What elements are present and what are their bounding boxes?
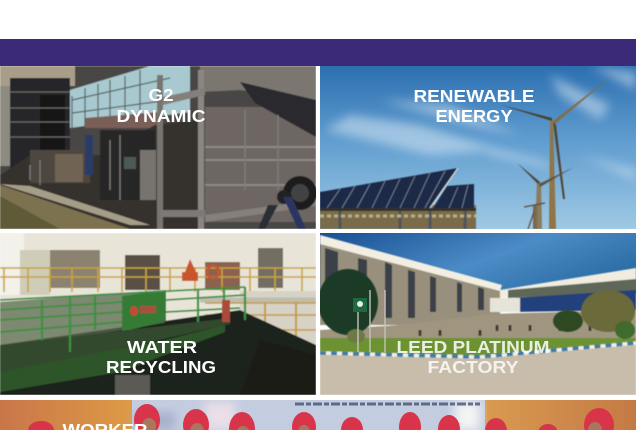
label: Water Recycling	[107, 341, 215, 373]
tank	[0, 310, 316, 395]
panel: Worker photo strip	[0, 400, 636, 430]
label: G2 Dynamic	[118, 89, 205, 122]
green structure	[0, 290, 165, 350]
photo: dyeing machine	[0, 66, 317, 229]
label: Renewable Energy: RENEWABLE	[414, 86, 534, 106]
ground	[320, 340, 636, 395]
clouds	[325, 66, 636, 180]
panel: G2 Dynamic	[0, 66, 317, 229]
flag poles and flag	[353, 290, 385, 352]
illustration: wind turbines	[501, 75, 613, 229]
building	[320, 240, 500, 325]
label: Water Recycling: RECYCLING	[106, 357, 216, 377]
glass wall	[70, 66, 190, 128]
label: LEED Platinum Factory: FACTORY	[428, 357, 519, 377]
panel: Renewable Energy	[320, 66, 636, 229]
panel: LEED Platinum Factory	[318, 233, 636, 395]
photo: recycling plant	[0, 233, 316, 395]
header band	[0, 39, 636, 66]
label: Water Recycling: WATER	[127, 337, 197, 357]
label: LEED Platinum Factory: LEED PLATINUM	[396, 337, 550, 357]
wall and floor	[240, 290, 316, 345]
illustration: solar panels	[320, 168, 476, 229]
label: G2 Dynamic: G2	[148, 85, 174, 105]
label: LEED Platinum Factory	[398, 341, 548, 373]
faces	[142, 418, 602, 430]
photo: sky	[320, 66, 636, 229]
machine body	[0, 120, 200, 229]
trees	[318, 269, 635, 343]
panel: Water Recycling	[0, 233, 316, 395]
label: Renewable Energy: ENERGY	[436, 106, 513, 126]
machine details	[30, 150, 90, 183]
floor	[0, 185, 130, 229]
banner text	[295, 402, 480, 406]
label: Renewable Energy	[414, 90, 534, 122]
photo: wood walls and banner	[0, 400, 132, 430]
label: G2 Dynamic: DYNAMIC	[116, 106, 206, 126]
workers	[28, 404, 614, 430]
roller	[283, 176, 317, 210]
photo: factory building	[320, 233, 636, 293]
